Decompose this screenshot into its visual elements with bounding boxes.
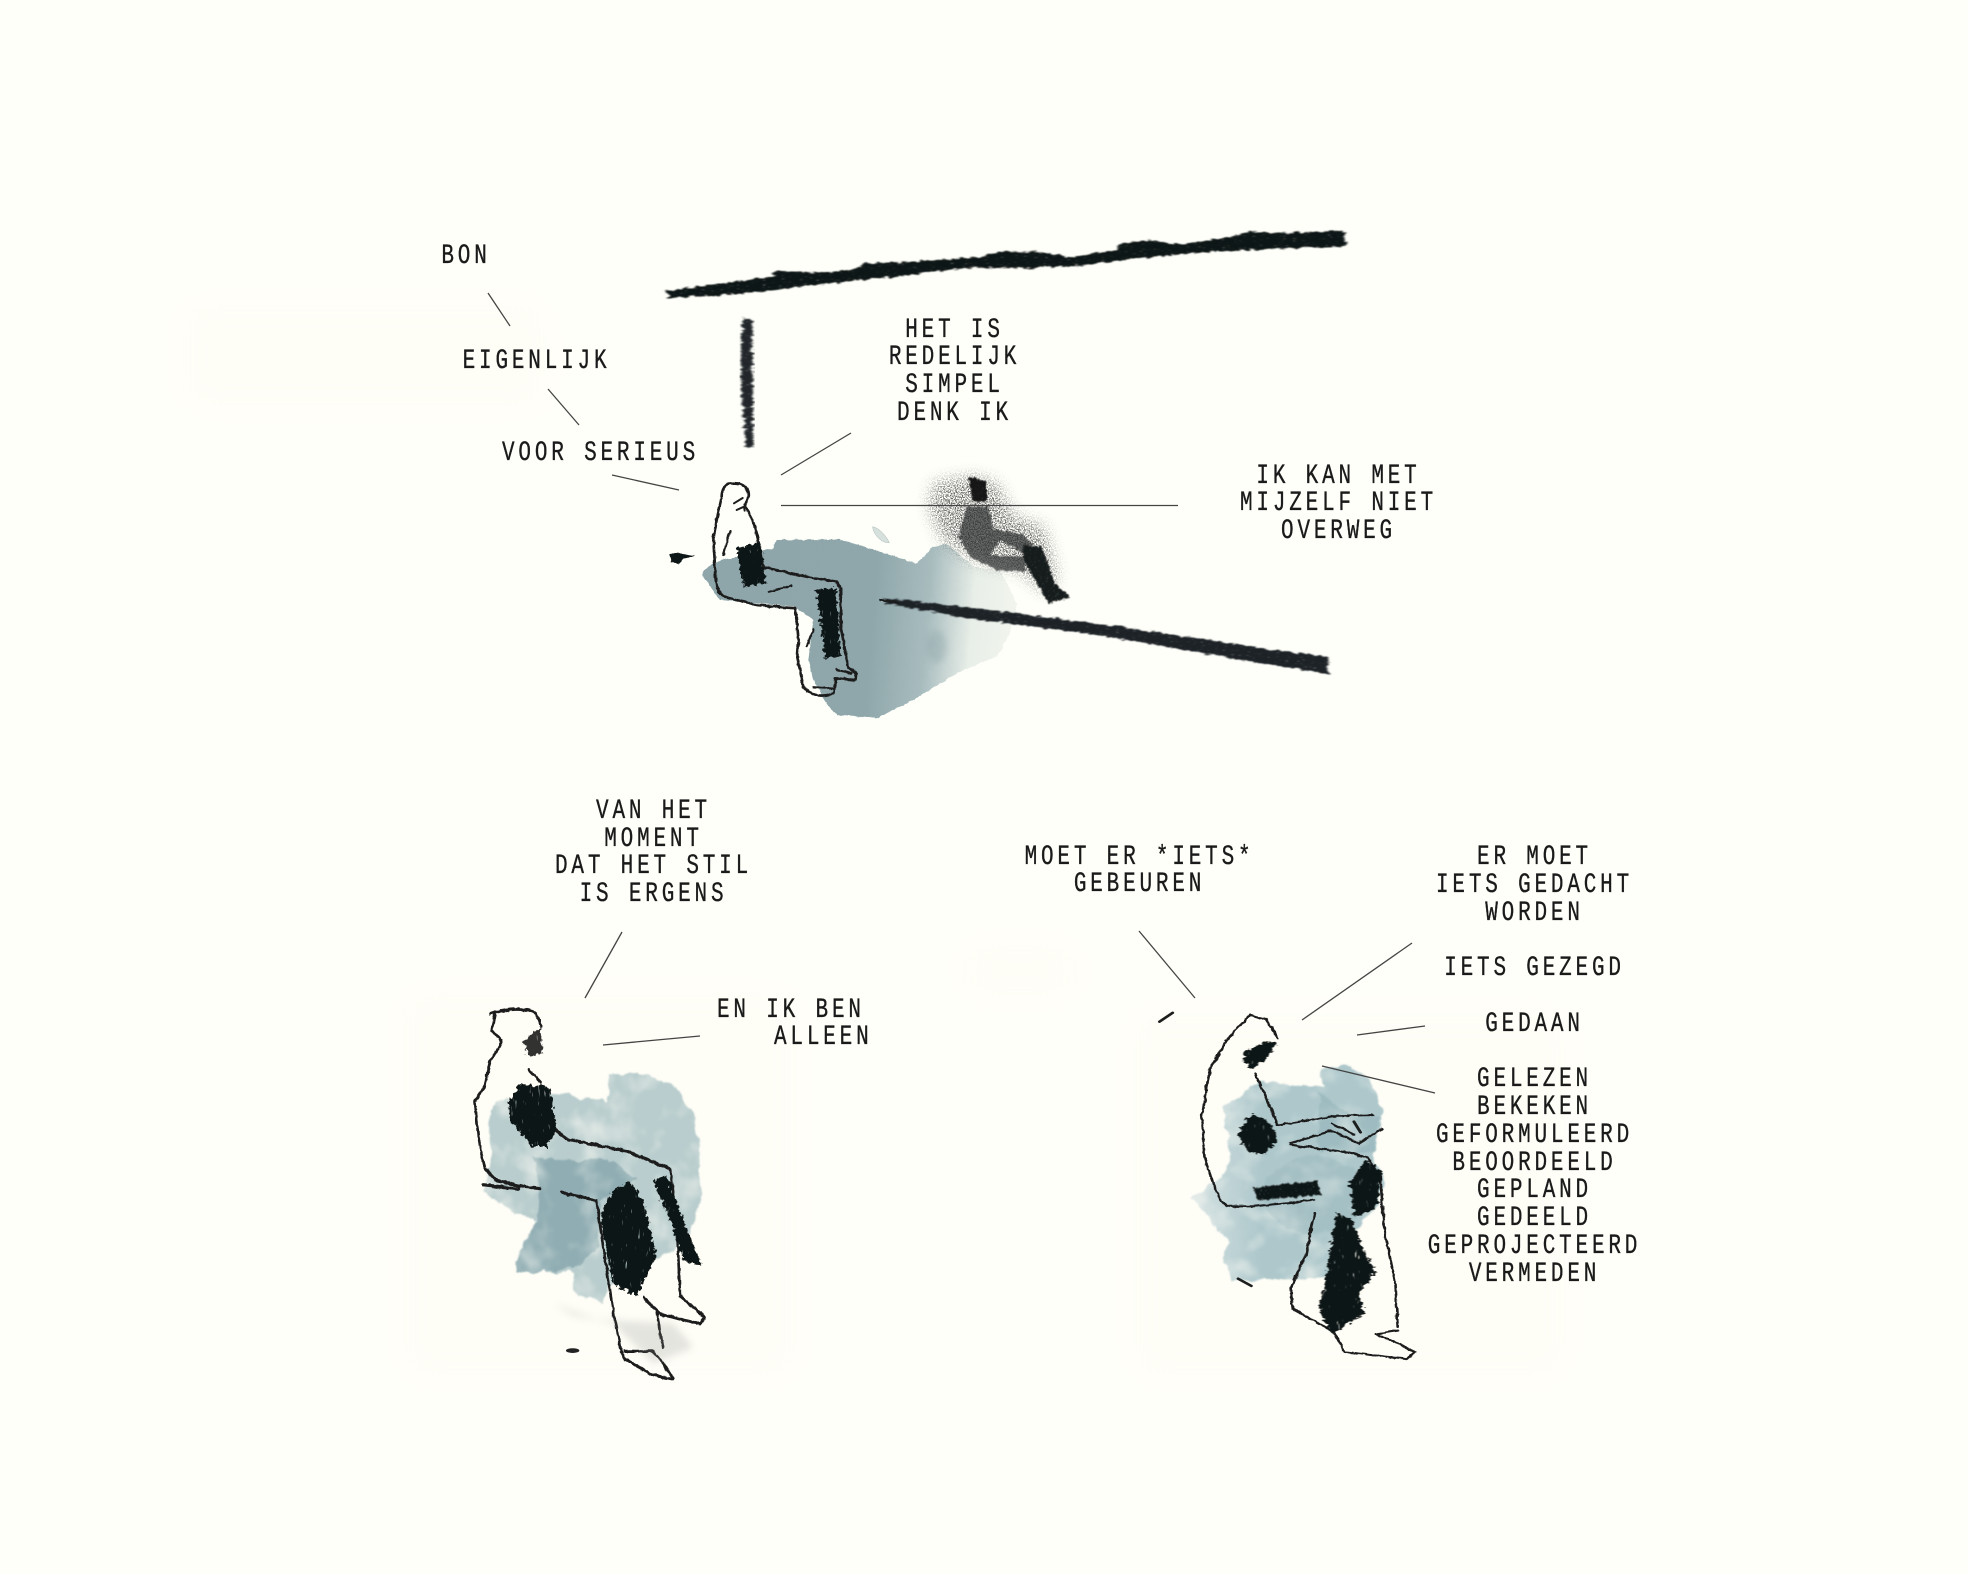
knee shading xyxy=(600,1182,657,1296)
torso shading xyxy=(737,543,766,587)
text: list of verbs: GELEZEN xyxy=(1477,1063,1592,1095)
text: moet er iets gebeuren: MOET ER *IETS* xyxy=(1025,841,1254,873)
charcoal stroke: top horizontal beam xyxy=(665,230,1346,298)
leg shading xyxy=(653,1175,702,1266)
text: van het moment dat het stil is ergens xyxy=(555,795,752,910)
figure: small seated person, top xyxy=(713,483,898,696)
text: ik kan met mijzelf niet overweg: MIJZELF NIET xyxy=(1240,487,1437,519)
torso shading xyxy=(508,1084,557,1147)
text: en ik ben alleen xyxy=(717,994,873,1053)
text: moet er iets gebeuren xyxy=(1025,841,1254,900)
text: list of verbs: BEOORDEELD xyxy=(1452,1147,1617,1179)
text: en ik ben alleen: EN IK BEN xyxy=(717,994,865,1026)
figure: seated person, lower left xyxy=(475,1009,705,1379)
text: er moet iets gedacht worden: ER MOET xyxy=(1477,841,1592,873)
text: list of verbs: GEPLAND xyxy=(1477,1174,1592,1206)
watercolour wash: top figure xyxy=(702,527,1017,718)
text: list of verbs: GEDEELD xyxy=(1477,1202,1592,1234)
text: ik kan met mijzelf niet overweg: OVERWEG xyxy=(1281,515,1396,547)
face shading xyxy=(1243,1041,1277,1068)
text: voor serieus: VOOR SERIEUS xyxy=(502,437,699,469)
watercolour wash xyxy=(483,1074,700,1304)
figure outline xyxy=(713,483,856,696)
figure outline xyxy=(475,1009,705,1379)
text: het is redelijk simpel denk ik: HET IS xyxy=(905,314,1004,346)
text: van het moment dat het stil is ergens: MOMENT xyxy=(604,823,703,855)
text: eigenlijk: EIGENLIJK xyxy=(463,345,610,377)
text: moet er iets gebeuren: GEBEUREN xyxy=(1074,868,1205,900)
thigh band xyxy=(1253,1181,1321,1200)
text: van het moment dat het stil is ergens: DAT HET STIL xyxy=(555,850,752,882)
text: het is redelijk simpel denk ik: REDELIJK xyxy=(889,341,1020,373)
text: er moet iets gedacht worden: IETS GEDACHT xyxy=(1436,869,1633,901)
text: list of verbs xyxy=(1428,1063,1641,1290)
figure outline xyxy=(1202,1015,1415,1359)
darker wash overlay xyxy=(515,1157,637,1272)
torso shading xyxy=(1238,1113,1277,1156)
small ink marks xyxy=(1160,1013,1361,1286)
text: list of verbs: VERMEDEN xyxy=(1469,1258,1600,1290)
connector lines: lower right figure xyxy=(1139,931,1435,1093)
text: bon: BON xyxy=(441,240,491,272)
knee shading xyxy=(1350,1159,1382,1216)
text: het is redelijk simpel denk ik: SIMPEL xyxy=(905,369,1004,401)
text: ik kan met mijzelf niet overweg: IK KAN MET xyxy=(1256,460,1421,492)
smudged charcoal shadow figure xyxy=(930,477,1070,603)
connector lines: top figure xyxy=(488,293,1178,506)
small marks xyxy=(723,531,898,689)
shin shading xyxy=(817,588,841,658)
text: ik kan met mijzelf niet overweg xyxy=(1240,460,1437,547)
face shading xyxy=(523,1026,543,1056)
wash fleck xyxy=(873,527,889,543)
shin shading xyxy=(1319,1213,1376,1334)
text: iets gezegd: IETS GEZEGD xyxy=(1444,952,1625,984)
text: van het moment dat het stil is ergens: IS ERGENS xyxy=(580,878,727,910)
text: en ik ben alleen: ALLEEN xyxy=(774,1021,873,1053)
small ink mark by the first figure xyxy=(669,553,695,564)
darker wash circle xyxy=(1264,1156,1365,1234)
text: list of verbs: BEKEKEN xyxy=(1477,1091,1592,1123)
face marks xyxy=(734,498,745,511)
text: van het moment dat het stil is ergens: VAN HET xyxy=(596,795,711,827)
connector lines: lower left figure xyxy=(585,932,700,1045)
figure: seated person reading, lower right xyxy=(1160,1013,1415,1359)
text: list of verbs: GEFORMULEERD xyxy=(1436,1119,1633,1151)
floor smudge xyxy=(553,1304,693,1363)
charcoal stroke: vertical bar xyxy=(741,318,754,448)
charcoal stroke: lower diagonal bar xyxy=(884,598,1328,674)
text: het is redelijk simpel denk ik xyxy=(889,314,1020,429)
paper tone patches xyxy=(180,300,1570,1380)
watercolour wash xyxy=(1192,1065,1385,1281)
darker wash overlay xyxy=(1319,1091,1380,1152)
text: er moet iets gedacht worden: WORDEN xyxy=(1485,897,1584,929)
text: list of verbs: GEPROJECTEERD xyxy=(1428,1230,1641,1262)
text: gedaan: GEDAAN xyxy=(1485,1008,1584,1040)
text: er moet iets gedacht worden xyxy=(1436,841,1633,929)
text: het is redelijk simpel denk ik: DENK IK xyxy=(897,397,1012,429)
